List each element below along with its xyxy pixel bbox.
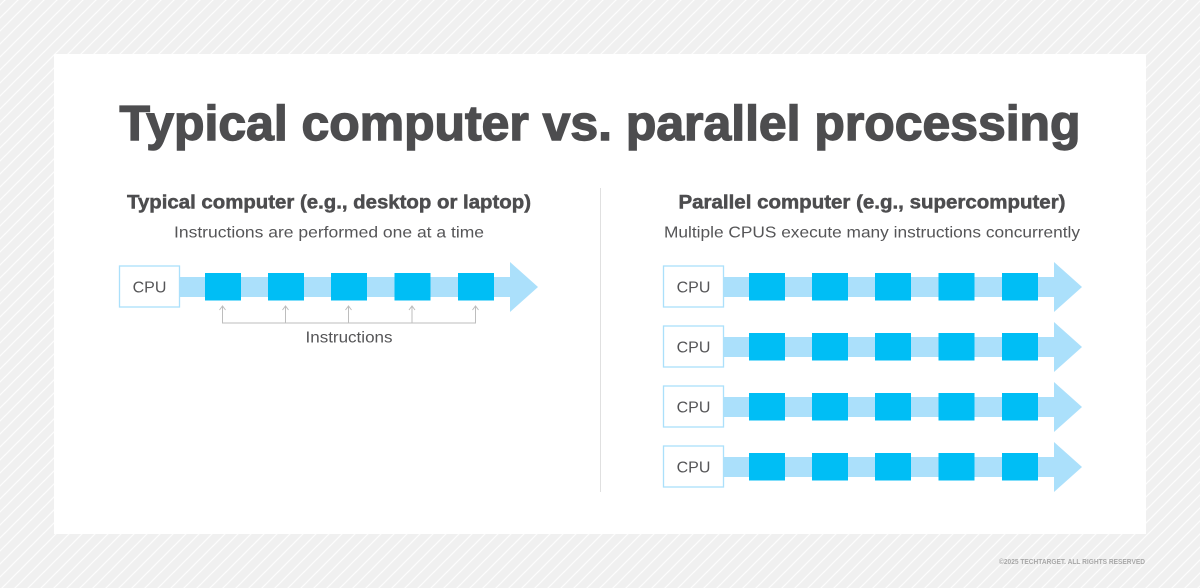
subheading: parallel computer: Multiple CPUS execute many instructions concurrently [664,224,1080,242]
heading: parallel computer: Parallel computer (e.g., supercomputer) [678,192,1066,214]
panel: typical computer [120,192,538,346]
instructions label: Instructions [306,330,392,346]
title: Typical computer vs. parallel processing [120,97,1080,151]
subheading: typical computer: Instructions are performed one at a time [174,224,484,242]
CPU flow 3: CPU [677,400,710,416]
heading: typical computer: Typical computer (e.g., desktop or laptop) [127,192,531,214]
instruction arrows [220,306,478,323]
panel divider [600,188,602,492]
CPU flow with instructions [120,262,538,312]
CPU flow 2: CPU [677,340,710,356]
white card panel [54,54,1146,534]
panel: parallel computer [664,192,1082,492]
CPU flow 3 [664,382,1082,432]
copyright: ©2025 TECHTARGET. ALL RIGHTS RESERVED [999,558,1145,566]
CPU flow 1: CPU [677,280,710,296]
CPU flow 4: CPU [677,460,710,476]
CPU flow 2 [664,322,1082,372]
CPU flow 4 [664,442,1082,492]
CPU flow 1 [664,262,1082,312]
CPU flow with instructions: CPU [133,280,166,296]
